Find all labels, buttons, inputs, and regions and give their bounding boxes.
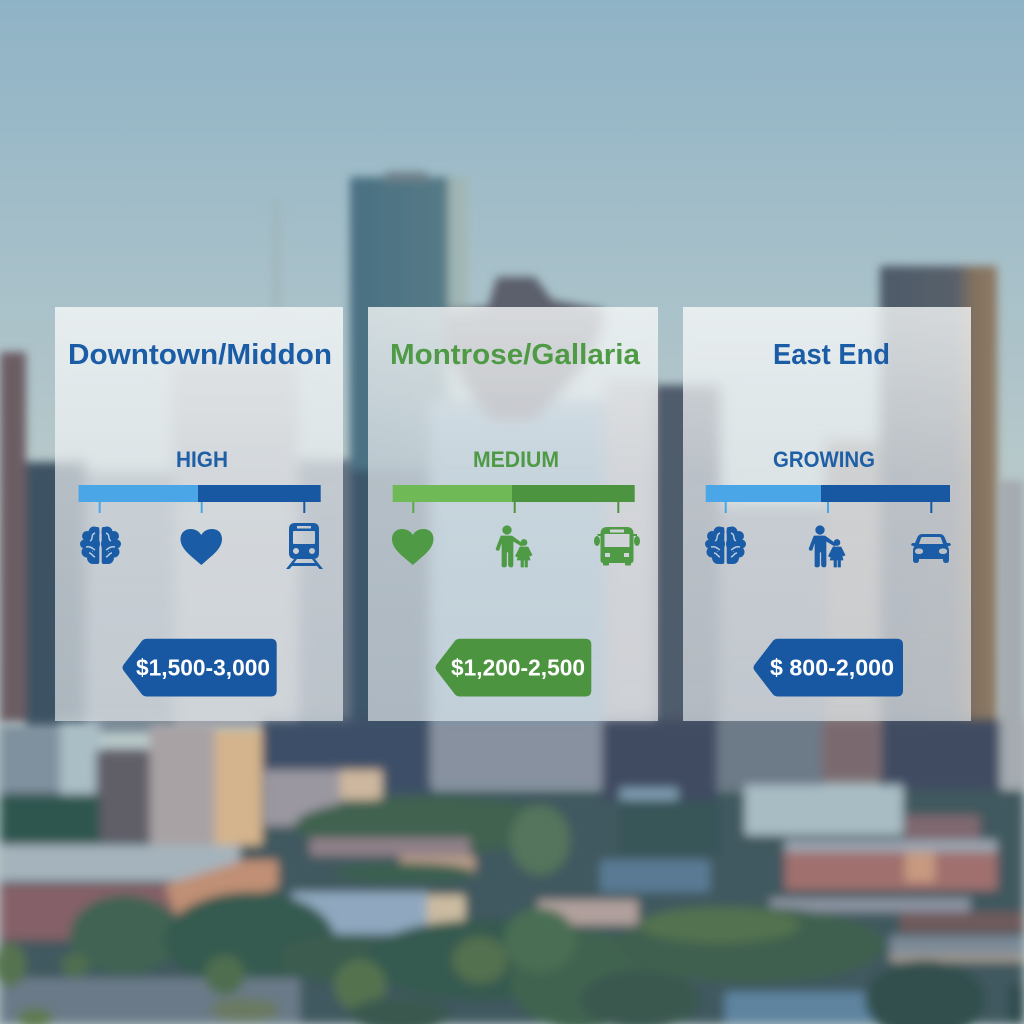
price tag: $1,200-2,500: [451, 654, 585, 680]
icon: heart: [392, 529, 434, 565]
ground base: [0, 790, 1024, 1024]
icon: heart: [180, 529, 222, 565]
icon: brain: [80, 526, 121, 564]
icon: adult and child: [809, 526, 845, 567]
heading: Downtown/Middon: [68, 339, 332, 371]
price tag: $1,500-3,000: [136, 654, 270, 680]
range bar: [78, 485, 321, 513]
level label: GROWING: [773, 447, 875, 472]
icon: bus: [594, 527, 640, 566]
panel: Montrose/Gallaria: [368, 307, 658, 721]
price tag: [436, 639, 591, 696]
icon: car: [911, 534, 951, 563]
heading: Montrose/Gallaria: [390, 339, 641, 371]
panel: East End: [683, 307, 971, 721]
heading: East End: [773, 339, 890, 371]
icon: brain: [705, 526, 746, 564]
icon: train: [286, 523, 323, 569]
range bar: [393, 485, 635, 513]
level label: MEDIUM: [473, 447, 559, 472]
price tag: [754, 639, 903, 696]
icon: adult and child: [496, 526, 532, 567]
panel: Downtown/Middon: [55, 307, 343, 721]
price tag: [122, 639, 277, 696]
price tag: $ 800-2,000: [770, 654, 894, 680]
range bar: [706, 485, 950, 513]
level label: HIGH: [176, 447, 228, 472]
